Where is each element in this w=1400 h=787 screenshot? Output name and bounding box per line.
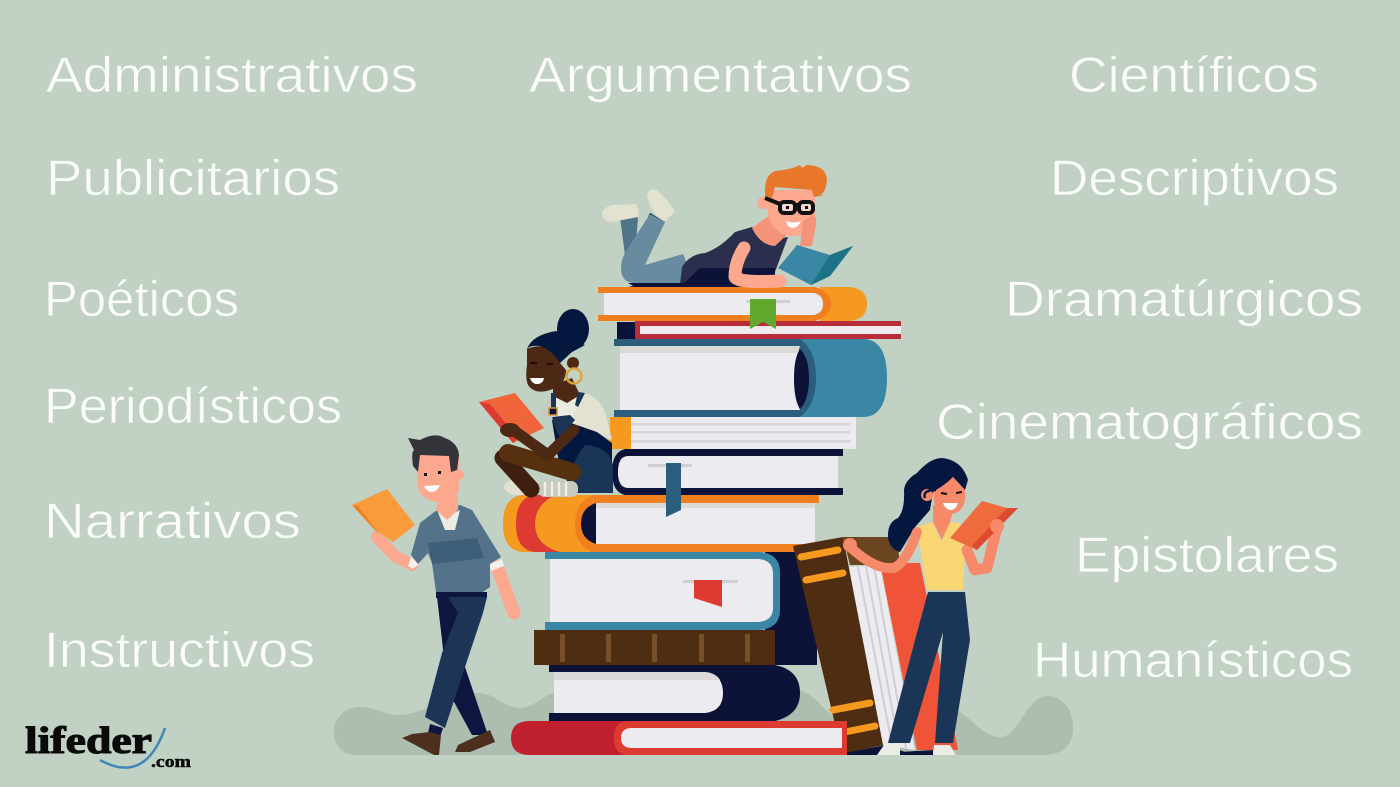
pupils (786, 206, 808, 209)
label: Instructivos: Instructivos (44, 622, 315, 678)
overalls (552, 417, 612, 493)
head (765, 190, 815, 236)
book: top orange with green bookmark (598, 287, 867, 329)
shoes (504, 479, 578, 497)
waistband (436, 592, 487, 598)
hand (500, 423, 520, 437)
right cuff (489, 559, 504, 571)
ear (921, 489, 933, 501)
hair (888, 458, 968, 552)
hand on reader book (990, 519, 1004, 533)
book: brown with ridges (534, 630, 775, 665)
arm (516, 430, 574, 455)
torso (628, 227, 788, 287)
book: leaning brown book (793, 537, 958, 755)
pants (570, 445, 613, 493)
eyes (530, 363, 553, 364)
eyes (941, 492, 962, 494)
book: orange with striped spine (503, 495, 819, 552)
label: Poéticos: Poéticos (44, 271, 239, 327)
book (778, 245, 853, 285)
label: Descriptivos: Descriptivos (1050, 150, 1339, 206)
sleeve shadow (540, 396, 552, 418)
left arm (377, 537, 412, 565)
smile (424, 485, 440, 492)
smile (530, 378, 544, 384)
sweater stripe (428, 538, 484, 564)
soles (900, 750, 933, 755)
undershirt (437, 510, 460, 530)
ear (757, 197, 769, 209)
bib (552, 415, 575, 437)
domain: .com (151, 752, 191, 771)
label: Publicitarios: Publicitarios (46, 150, 340, 206)
top (917, 522, 965, 590)
sock (428, 724, 443, 737)
right arm (497, 566, 514, 613)
book: navy thin with bookmark (612, 449, 843, 517)
character: boy lying on books (602, 165, 853, 287)
lower leg back (620, 214, 638, 255)
glasses (765, 198, 813, 213)
smile (786, 221, 801, 228)
hair (408, 435, 459, 472)
sweater (411, 505, 501, 592)
ground hills (334, 690, 1073, 755)
hair (527, 331, 585, 363)
label: Periodísticos: Periodísticos (44, 378, 342, 434)
text types list (44, 47, 1363, 688)
arm (735, 248, 780, 282)
logo: lifeder.com (25, 720, 191, 771)
ear (567, 357, 579, 369)
book: pages with yellow spine (610, 417, 856, 449)
book: big teal cover (614, 339, 887, 417)
character: seated reader (479, 309, 613, 497)
smile (943, 503, 958, 510)
neck (752, 215, 790, 246)
left cuff (408, 557, 419, 569)
hair (765, 165, 827, 198)
front leg (508, 453, 572, 472)
shoes (402, 730, 495, 755)
label: Argumentativos: Argumentativos (529, 47, 912, 103)
book (950, 501, 1018, 550)
eyes (424, 471, 441, 476)
wordmark: lifeder (25, 720, 152, 762)
jeans (621, 214, 695, 283)
label: Cinematográficos: Cinematográficos (936, 394, 1363, 450)
book (479, 393, 544, 443)
front leg (425, 597, 487, 728)
label: Administrativos: Administrativos (46, 47, 418, 103)
straps (551, 392, 585, 414)
back leg (437, 597, 488, 735)
book: navy rounded (549, 665, 800, 721)
buckle (549, 408, 557, 415)
neck (933, 505, 953, 540)
shoes (877, 743, 956, 755)
bun (557, 309, 589, 349)
neck (436, 495, 458, 520)
head (417, 455, 459, 502)
hand on book (843, 538, 857, 552)
shirt (568, 393, 612, 440)
book: teal cover with red bookmark (545, 552, 780, 630)
hair lock (924, 490, 936, 498)
label: Humanísticos: Humanísticos (1033, 632, 1353, 688)
chest (551, 393, 582, 420)
hand on cheek (800, 216, 816, 246)
label: Científicos: Científicos (1069, 47, 1319, 103)
book: red bottom (511, 721, 847, 755)
swoosh (100, 728, 165, 768)
face (933, 477, 965, 514)
neck (553, 378, 580, 403)
arm on book (850, 532, 917, 568)
earring (566, 368, 582, 384)
label: Narrativos: Narrativos (44, 493, 301, 549)
label: Dramatúrgicos: Dramatúrgicos (1005, 271, 1363, 327)
book: thin red (617, 321, 901, 339)
legs (503, 458, 531, 489)
illustration: book stack (503, 287, 958, 755)
legs (888, 592, 970, 743)
right arm (967, 527, 997, 570)
character: standing man reading (352, 435, 514, 755)
head (526, 346, 566, 392)
label: Epistolares: Epistolares (1075, 527, 1339, 583)
ear (454, 470, 464, 480)
character: woman reading beside book (843, 458, 1018, 755)
shoes (602, 189, 675, 222)
book: navy block behind (765, 552, 817, 665)
sock (648, 213, 665, 225)
book (352, 489, 415, 542)
